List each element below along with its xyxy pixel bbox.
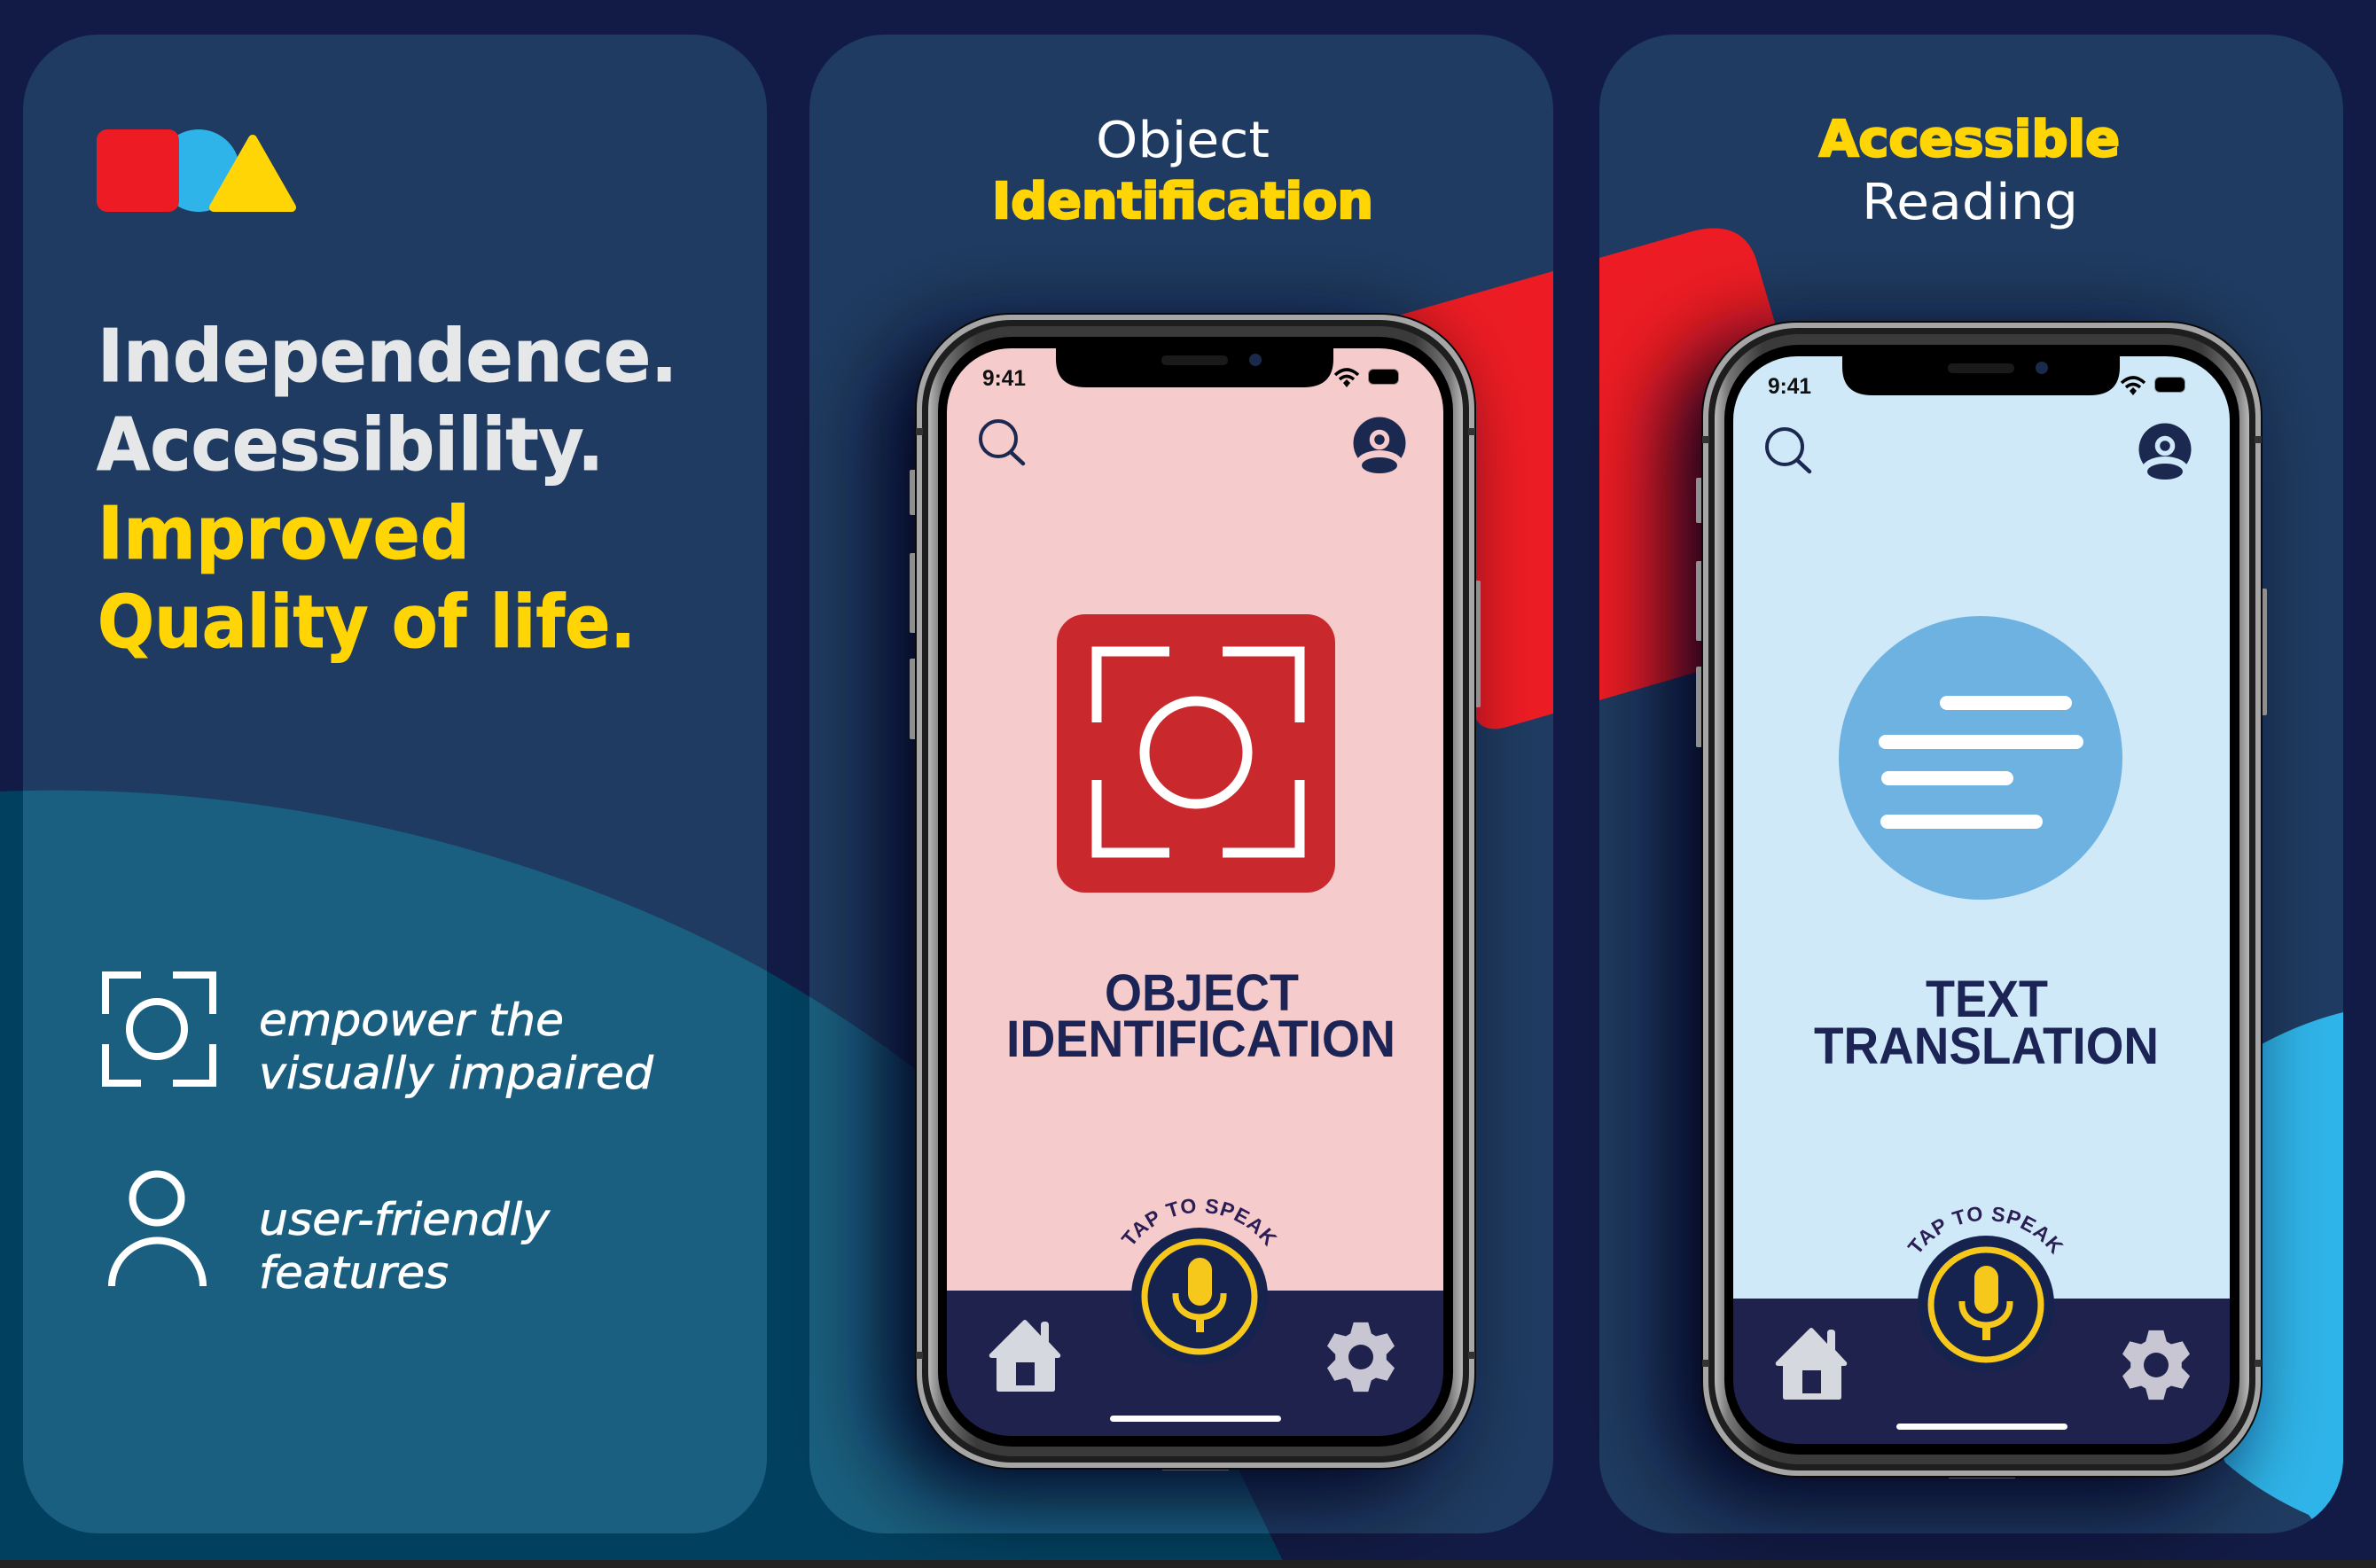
heading: accessible reading: Reading bbox=[1862, 174, 2078, 231]
headline bbox=[97, 315, 677, 665]
heading: accessible reading bbox=[1819, 111, 2120, 231]
logo bbox=[97, 129, 292, 212]
screen label: OBJECT bbox=[1105, 964, 1299, 1022]
feature text: user-friendly: user-friendly bbox=[259, 1194, 551, 1245]
feature text: empower: empower the bbox=[259, 995, 564, 1046]
panel: intro card bbox=[23, 35, 767, 1533]
tap to speak arc: TAP TO SPEAK bbox=[1907, 1207, 2064, 1255]
icon: focus frame bbox=[106, 975, 213, 1083]
screen label bbox=[1814, 971, 2159, 1075]
headline: Quality of life. bbox=[98, 581, 636, 665]
teal wave inside cards bbox=[0, 791, 1286, 1568]
feature text: user-friendly: features bbox=[259, 1247, 449, 1299]
heading: object identification: Object bbox=[1096, 112, 1270, 169]
panel: object identification card bbox=[809, 35, 1553, 1533]
status time: 9:41 bbox=[1768, 374, 1811, 399]
feature text: empower bbox=[259, 995, 653, 1099]
screen label bbox=[1006, 964, 1395, 1068]
home indicator bbox=[1110, 1416, 1281, 1422]
tap to speak arc: TAP TO SPEAK bbox=[1121, 1198, 1278, 1246]
feature text: empower: visually impaired bbox=[259, 1048, 653, 1099]
teal wave background bbox=[0, 791, 1286, 1568]
headline: Accessibility. bbox=[97, 403, 604, 488]
headline: Independence. bbox=[98, 315, 677, 399]
panel: accessible reading card bbox=[1599, 35, 2343, 1533]
heading: object identification: Identification bbox=[992, 173, 1373, 230]
status time: 9:41 bbox=[982, 366, 1026, 391]
icon: text lines circle bbox=[1839, 616, 2122, 900]
blue curved shape in reading card bbox=[2224, 1012, 2343, 1519]
icon: profile bbox=[1353, 417, 1406, 475]
screen label: IDENTIFICATION bbox=[1006, 1010, 1395, 1068]
icon: camera focus tile bbox=[1057, 614, 1335, 893]
bottom dark strip bbox=[0, 1560, 2376, 1568]
phone: text translation bbox=[1636, 285, 2302, 1537]
icon: profile bbox=[2138, 424, 2192, 481]
screen label: TEXT bbox=[1926, 971, 2048, 1028]
red rotated shape spanning cards bbox=[1400, 229, 1775, 729]
feature text: user-friendly bbox=[259, 1194, 551, 1299]
screen label: TRANSLATION bbox=[1814, 1018, 2159, 1075]
headline: Improved bbox=[98, 492, 470, 576]
home indicator bbox=[1896, 1424, 2067, 1430]
phone: object identification bbox=[849, 277, 1516, 1530]
heading: object identification bbox=[992, 112, 1373, 230]
icon: user bbox=[112, 1174, 203, 1286]
heading: accessible reading: Accessible bbox=[1819, 111, 2120, 168]
